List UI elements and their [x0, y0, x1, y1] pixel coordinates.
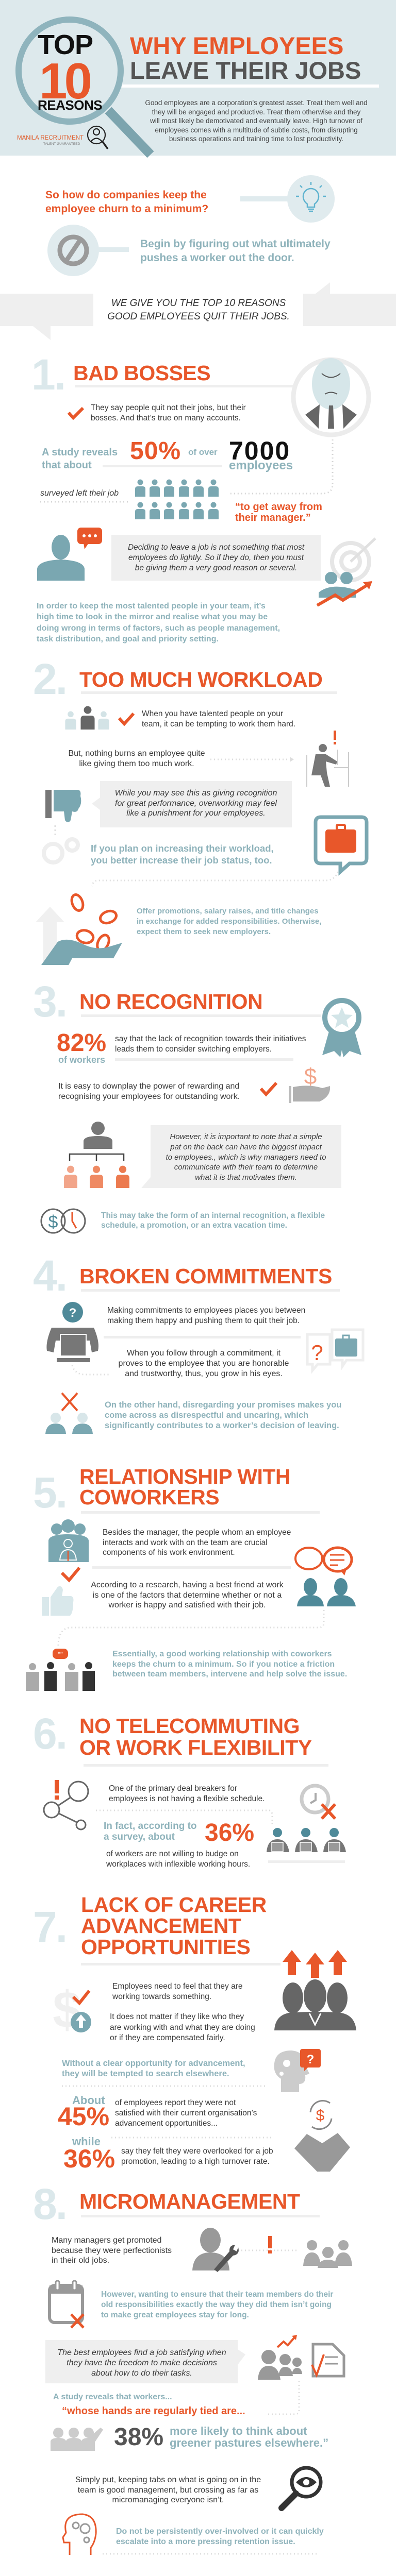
- stat 50%: 7000: [229, 436, 290, 465]
- text: escalate into a more pressing retention issue.: [116, 2537, 295, 2546]
- heading: BAD BOSSES: [73, 361, 210, 385]
- text: [52, 2235, 172, 2266]
- banner: top reasons: [0, 282, 396, 340]
- text: [103, 1528, 291, 1557]
- text: of workers are not willing to budge on: [106, 1850, 239, 1858]
- answer text: pushes a worker out the door.: [140, 252, 294, 264]
- callout text: about how to do their tasks.: [91, 2369, 192, 2378]
- text: significantly contributes to a worker’s decision of leaving.: [105, 1421, 339, 1430]
- section 8: micromanagement: more likely to think about: [170, 2425, 307, 2437]
- text: [101, 2290, 333, 2320]
- banner text: WE GIVE YOU THE TOP 10 REASONS: [111, 298, 286, 309]
- text: According to a research, having a best friend at work: [91, 1581, 284, 1589]
- icon: team: [48, 1519, 89, 1562]
- section 7: career advancement: [33, 1893, 280, 2173]
- connector dotted s4: [72, 1365, 111, 1375]
- intro paragraph: employees comes with a multitude of subtle costs, from disrupting: [155, 126, 358, 134]
- icon: clocks: [44, 1780, 88, 1829]
- icon: org chart people: [64, 1154, 129, 1188]
- icon: handshake: [294, 2133, 350, 2172]
- heading: [79, 1465, 290, 1509]
- section 8: micromanagement: greener pastures elsewhere.”: [170, 2436, 328, 2449]
- text: One of the primary deal breakers for: [109, 1784, 237, 1793]
- heading: OPPORTUNITIES: [81, 1935, 250, 1959]
- text: come across as disrespectful and uncaring, which: [105, 1411, 308, 1420]
- text: they will be tempted to search elsewhere.: [62, 2069, 229, 2078]
- icon: worker at desk: [307, 731, 349, 787]
- icon: prohibition circle: [47, 225, 129, 276]
- text: Simply put, keeping tabs on what is going on in the: [75, 2476, 261, 2484]
- stat 50%: that about: [42, 460, 92, 471]
- text: [119, 1349, 289, 1378]
- text: When you follow through a commitment, it: [127, 1349, 280, 1358]
- section 3: no recognition: of workers: [58, 1055, 105, 1065]
- icon: thinking head: [274, 2049, 321, 2092]
- number 1: 1.: [31, 350, 64, 399]
- text: team is good management, but crossing as far as: [78, 2485, 258, 2495]
- callout text: what it is that motivates them.: [195, 1173, 297, 1182]
- arrow: dotted: [210, 757, 294, 762]
- icon: manager: [84, 1122, 112, 1149]
- icon: target and growth: [317, 538, 375, 605]
- number 5: 5.: [33, 1468, 66, 1517]
- callout text: However, it is important to note that a simple: [170, 1132, 322, 1141]
- text: [116, 2527, 324, 2547]
- callout text: While you may see this as giving recognition: [115, 789, 277, 798]
- intro paragraph: Good employees are a corporation’s greatest asset. Treat them well and: [145, 99, 368, 107]
- text: Making commitments to employees places you between: [107, 1306, 305, 1315]
- text: [107, 1306, 305, 1325]
- text: interacts and work with on the team are crucial: [103, 1538, 268, 1547]
- icon: dollar refresh: $: [316, 2107, 325, 2124]
- callout text: be giving them a very good reason or several.: [135, 564, 297, 572]
- stat 50%: of over: [188, 447, 218, 457]
- stat 82%: 82%: [57, 1029, 106, 1057]
- icon: bad boss: [293, 358, 369, 435]
- number 4: 4.: [33, 1251, 66, 1300]
- text: Without a clear opportunity for advancement,: [62, 2059, 245, 2068]
- icon: thumbs down: [45, 790, 81, 837]
- question heading: [45, 189, 208, 215]
- stat 45%: About: [72, 2094, 105, 2107]
- text: leads them to consider switching employers.: [115, 1045, 272, 1054]
- quote: [235, 501, 322, 523]
- question heading: employee churn to a minimum?: [45, 203, 208, 215]
- text offer: [137, 907, 321, 936]
- heading: NO RECOGNITION: [79, 990, 262, 1013]
- text: bosses. And that’s true on many accounts.: [91, 414, 241, 422]
- stat 50%: [42, 436, 293, 472]
- icon: three workers: [267, 1828, 346, 1863]
- highlight text: you better increase their job status, too.: [91, 855, 272, 866]
- icon: person with laptop question: [46, 1302, 98, 1362]
- icon: thumbs up: [42, 1586, 73, 1616]
- icon: gears: [44, 839, 78, 862]
- title block: top 10 reasons: REASONS: [38, 97, 102, 113]
- icon: ribbon award: [322, 1001, 361, 1057]
- icon: manager with wrench: [192, 2228, 352, 2272]
- title: [130, 32, 361, 84]
- heading: COWORKERS: [79, 1485, 219, 1509]
- text: workplaces with inflexible working hours.: [106, 1860, 250, 1869]
- text: Besides the manager, the people whom an employee: [103, 1528, 291, 1537]
- text: On the other hand, disregarding your promises makes you: [105, 1400, 341, 1410]
- icon: idea people: [51, 2428, 103, 2451]
- text offer: expect them to seek new employers.: [137, 927, 271, 936]
- text: and trustworthy, thus, you grow in his eyes.: [125, 1369, 283, 1378]
- text: [115, 1035, 306, 1054]
- section 5: relationship with coworkers: [33, 1465, 347, 1679]
- logo small: TALENT GUARANTEED: [43, 142, 80, 146]
- text: They say people quit not their jobs, but their: [91, 403, 246, 412]
- callout box: section 2: [92, 781, 292, 827]
- text: between team members, intervene and help solve the issue.: [112, 1670, 347, 1679]
- text: are working with and what they are doing: [110, 2023, 255, 2032]
- callout text: communicate with their team to determine: [174, 1163, 318, 1172]
- text offer: Offer promotions, salary raises, and title changes: [137, 907, 319, 916]
- title block: top 10 reasons: [38, 29, 102, 113]
- text: [112, 1650, 347, 1679]
- callout text: like a punishment for your employees.: [126, 809, 266, 818]
- text: Essentially, a good working relationship with coworkers: [112, 1650, 332, 1658]
- title block: top 10 reasons: 10: [39, 53, 89, 109]
- text: [101, 1211, 325, 1230]
- icon: briefcase bubble: [316, 817, 367, 872]
- callout text: to employees., which is why managers need to: [166, 1153, 326, 1161]
- icon: group people: [26, 1649, 95, 1691]
- section 7: career advancement: advancement opportunities...: [115, 2119, 218, 2128]
- stat 36%: while: [72, 2135, 101, 2148]
- icon: person with speech: [37, 528, 102, 581]
- callout text: employees do lightly. So if they do, then you must: [128, 553, 304, 562]
- text: [105, 1400, 341, 1430]
- number 7: 7.: [33, 1903, 66, 1951]
- text: say that the lack of recognition towards their initiatives: [115, 1035, 306, 1043]
- text: [91, 1581, 284, 1609]
- text: working towards something.: [112, 1992, 211, 2001]
- paragraph s1: In order to keep the most talented people in your team, it’s: [37, 602, 266, 611]
- icon: orange head gears: [63, 2514, 96, 2555]
- icon: money and clock: [41, 1209, 85, 1233]
- paragraph s1: high time to look in the mirror and realise what you may be: [37, 613, 268, 621]
- connector dotted s5: [58, 1610, 324, 1646]
- callout text: Deciding to leave a job is not something that most: [128, 543, 304, 552]
- header background: [0, 0, 396, 156]
- section 7: career advancement: 36%: [63, 2144, 115, 2173]
- callout text: [49, 2348, 235, 2379]
- number 6: 6.: [33, 1709, 66, 1758]
- icon: calendar x: [50, 2281, 84, 2328]
- surveyed text: surveyed left their job: [40, 489, 119, 498]
- section 7: career advancement: 45%: [58, 2102, 109, 2131]
- text: However, wanting to ensure that their team members do their: [101, 2290, 333, 2299]
- paragraph s1: task distribution, and goal and priority setting.: [37, 635, 219, 643]
- text: worker is happy and satisfied with their job.: [108, 1601, 266, 1609]
- icon: question and briefcase bubbles: [307, 1330, 363, 1370]
- text: [142, 709, 295, 728]
- stat 50%: 50%: [130, 437, 181, 465]
- text: team, it can be tempting to work them hard.: [142, 720, 295, 728]
- text: [110, 2012, 255, 2043]
- study text: A study reveals that workers...: [53, 2393, 172, 2401]
- text: [62, 2059, 245, 2079]
- section 7: career advancement: say they felt they were overlooked for a job: [121, 2147, 273, 2156]
- callout text: [166, 1132, 326, 1182]
- icon: three people: [65, 706, 109, 730]
- icon: check s3: [261, 1083, 276, 1094]
- text: [65, 2475, 271, 2505]
- icon: money and clock: $: [48, 1212, 58, 1232]
- icon: person with laptop question: ?: [69, 1306, 76, 1320]
- callout box: section 1: [111, 535, 321, 581]
- icon: header magnifier: [19, 20, 379, 155]
- stat 50%: employees: [229, 459, 293, 472]
- callout text: [128, 543, 305, 572]
- text: components of his work environment.: [103, 1548, 235, 1557]
- stat 36%: [104, 1821, 197, 1842]
- heading: NO TELECOMMUTING: [79, 1714, 300, 1738]
- quote: their manager.”: [235, 512, 311, 523]
- text: When you have talented people on your: [142, 709, 283, 718]
- section 7: career advancement: satisfied with their current organisation’s: [115, 2109, 257, 2117]
- icon: check s7: [73, 1991, 89, 2003]
- stat 50%: A study reveals: [42, 447, 118, 458]
- dotted lines s7: [62, 2086, 273, 2138]
- answer text: Begin by figuring out what ultimately: [140, 238, 331, 250]
- callout text: The best employees find a job satisfying when: [57, 2348, 226, 2357]
- text: because they were perfectionists: [52, 2246, 172, 2255]
- heading: MICROMANAGEMENT: [79, 2190, 300, 2213]
- banner text: GOOD EMPLOYEES QUIT THEIR JOBS.: [107, 311, 290, 322]
- section 1: bad bosses: [31, 350, 322, 572]
- text: Employees need to feel that they are: [112, 1982, 242, 1991]
- stat 36%: a survey, about: [104, 1832, 175, 1842]
- icon: dollar up: $: [53, 1981, 81, 2039]
- text: Do not be persistently over-involved or it can quickly: [116, 2527, 324, 2536]
- callout box: section 3: [141, 1125, 341, 1188]
- icon: light bulb circle: [240, 175, 335, 223]
- text: micromanaging everyone isn’t.: [112, 2496, 224, 2504]
- heading: OR WORK FLEXIBILITY: [79, 1736, 312, 1759]
- section 2: too much workload: [33, 655, 337, 936]
- text: But, nothing burns an employee quite: [68, 749, 205, 758]
- paragraph s1: [37, 602, 280, 643]
- text: to make great employees stay for long.: [101, 2311, 249, 2319]
- icon: check s2: [119, 714, 134, 724]
- icon: small logo magnifier: [88, 126, 108, 149]
- icon: up arrows and people: [274, 1950, 356, 2030]
- text: This may take the form of an internal recognition, a flexible: [101, 1211, 325, 1220]
- icon: 12 employees: [135, 479, 219, 519]
- stat 38%: 38%: [114, 2424, 163, 2451]
- intro paragraph: business operations and training time to lost productivity.: [169, 135, 343, 143]
- heading: ADVANCEMENT: [81, 1914, 241, 1938]
- icon: coins and hand: [36, 893, 122, 965]
- callout text: they have the freedom to make decisions: [67, 2359, 217, 2367]
- icon: x between people: [45, 1393, 93, 1434]
- text: in their old jobs.: [52, 2256, 109, 2265]
- callout text: [115, 789, 277, 818]
- text: keeps the churn to a minimum. So if you notice a friction: [112, 1660, 335, 1668]
- heading: LACK OF CAREER: [81, 1893, 267, 1917]
- connector dotted: [40, 439, 333, 502]
- logo small: MANILA RECRUITMENT: [17, 135, 84, 141]
- icon: happy team and checklist: [258, 2335, 344, 2380]
- text: [106, 1850, 250, 1869]
- heading: BROKEN COMMITMENTS: [79, 1264, 332, 1288]
- icon: question and briefcase bubbles: ?: [311, 1341, 323, 1365]
- logo small: [17, 135, 84, 146]
- icon: group people: “”: [58, 1650, 63, 1658]
- icon: dollar hand: [289, 1064, 330, 1103]
- icon: dollar hand: $: [304, 1064, 317, 1089]
- quote: “to get away from: [235, 501, 322, 513]
- icon: clock x: [302, 1786, 335, 1819]
- text: [58, 1082, 240, 1100]
- icon: thinking head: ?: [307, 2053, 314, 2066]
- callout text: for great performance, overworking may feel: [115, 799, 277, 808]
- number 2: 2.: [33, 655, 66, 703]
- section 8: micromanagement: “whose hands are regularly tied are...: [62, 2405, 245, 2417]
- line under 82%: [115, 1058, 293, 1061]
- heading: RELATIONSHIP WITH: [79, 1465, 290, 1488]
- text: It is easy to downplay the power of rewarding and: [58, 1082, 239, 1091]
- banner text: [107, 298, 290, 322]
- text: recognising your employees for outstanding work.: [58, 1092, 240, 1100]
- section 3: no recognition: [33, 977, 326, 1230]
- intro paragraph: [145, 99, 368, 143]
- paragraph s1: doing wrong in terms of factors, such as people management,: [37, 624, 280, 633]
- section 6: no telecommuting: [33, 1709, 328, 1869]
- intro paragraph: will most likely be demotivated and eventually leave. High turnover of: [150, 117, 362, 125]
- text: proves to the employee that you are honorable: [119, 1359, 289, 1368]
- text: making them happy and pushing them to quit their job.: [107, 1316, 300, 1325]
- text: [68, 749, 205, 768]
- text: [112, 1981, 242, 2002]
- icon: dollar refresh: [310, 2100, 332, 2129]
- text: is one of the factors that determine whether or not a: [93, 1591, 282, 1599]
- check icon: [67, 407, 85, 420]
- question heading: So how do companies keep the: [45, 189, 207, 201]
- text: [91, 403, 246, 422]
- heading: TOO MUCH WORKLOAD: [79, 668, 322, 691]
- section 7: career advancement: promotion, leading to a high turnover rate.: [121, 2157, 270, 2166]
- section 8: micromanagement: [0, 2182, 396, 2548]
- heading: [79, 1714, 312, 1759]
- text: schedule, a promotion, or an extra vacation time.: [101, 1221, 287, 1230]
- text: like giving them too much work.: [79, 759, 194, 768]
- icon: magnifier eye: [282, 2468, 321, 2508]
- intro paragraph: they will be engaged and productive. Treat them otherwise and they: [152, 108, 360, 116]
- highlight text: [91, 843, 274, 866]
- heading: [81, 1894, 267, 1958]
- stat 36%: In fact, according to: [104, 1821, 197, 1832]
- section 7: career advancement: of employees report they were not: [115, 2098, 236, 2107]
- answer text: [140, 238, 331, 264]
- connector dotted s6: [96, 1810, 272, 1824]
- number 8: 8.: [33, 2180, 66, 2228]
- title: LEAVE THEIR JOBS: [130, 57, 361, 84]
- text: old responsibilities exactly the way they did them isn’t going: [101, 2300, 332, 2309]
- connector dotted s8: [268, 2381, 299, 2414]
- text: or if they are compensated fairly.: [110, 2033, 225, 2042]
- number 3: 3.: [33, 977, 66, 1026]
- title: WHY EMPLOYEES: [130, 32, 343, 59]
- icon: check s5: [62, 1568, 79, 1580]
- title block: top 10 reasons: TOP: [38, 29, 93, 60]
- icon: chat coworkers: [295, 1548, 356, 1606]
- text: employees is not having a flexible schedule.: [109, 1794, 265, 1803]
- highlight text: If you plan on increasing their workload,: [91, 843, 274, 854]
- text: [109, 1784, 265, 1803]
- text: It does not matter if they like who they: [110, 2012, 244, 2021]
- text: Many managers get promoted: [52, 2236, 161, 2245]
- text offer: in exchange for added responsibilities. Otherwise,: [137, 917, 321, 926]
- connector dotted s2: [92, 872, 338, 886]
- callout box: section 8: [45, 2340, 245, 2383]
- section 6: no telecommuting: 36%: [205, 1819, 254, 1846]
- callout text: pat on the back can have the biggest impact: [170, 1143, 322, 1151]
- section 4: broken commitments: [33, 1251, 341, 1430]
